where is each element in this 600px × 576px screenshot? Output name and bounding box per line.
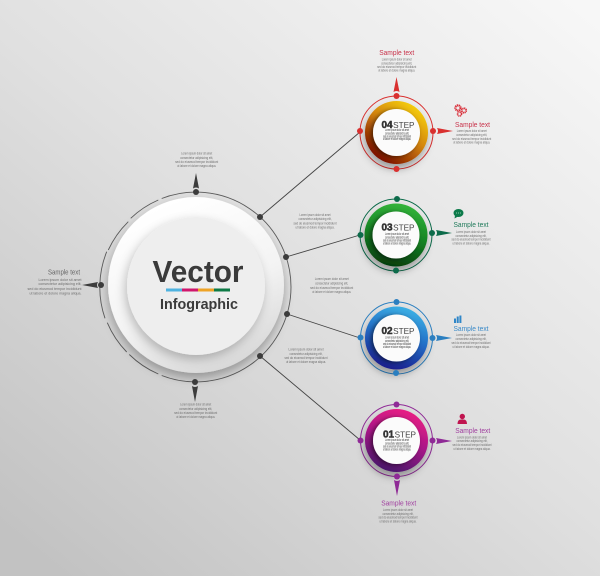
step 03 ring: [360, 199, 432, 271]
text block: between lines 3: ut labore et dolore magna aliqua.: [286, 360, 326, 364]
step 03: [358, 196, 435, 274]
arrow: step 04 top: [394, 77, 400, 92]
text block: between lines 2: consectetur adipisicing elit,: [315, 282, 348, 286]
step 03 copy: [383, 232, 411, 245]
text block: step 01 right: [452, 426, 492, 451]
icon: gears: [455, 105, 466, 116]
arrow: step 03 right: [436, 230, 452, 236]
step 01 dots: [358, 402, 436, 480]
hub white disc: [108, 197, 284, 373]
text block: step 03 right: consectetur adipisicing elit,: [456, 234, 486, 238]
text block: step 04 top: sed do eiusmod tempor incididunt: [377, 65, 416, 69]
text block: between lines 2: Lorem ipsum dolor sit amet: [315, 277, 349, 281]
text block: step 04 right: Sample text: [455, 120, 490, 129]
text block: step 02 right: ut labore et dolore magna aliqua.: [452, 345, 490, 349]
step 02: [358, 299, 436, 376]
icon: bar chart: [454, 316, 461, 323]
text block: step 04 top: Lorem ipsum dolor sit amet: [382, 58, 412, 62]
text block: between lines 1: ut labore et dolore magna aliqua.: [296, 226, 334, 230]
text block: step 01 bottom: Lorem ipsum dolor sit amet: [383, 508, 413, 512]
step 02 ring: [360, 302, 432, 374]
step 01 copy: ut labore et dolore magna aliqua.: [383, 448, 411, 452]
text block: between lines 1: [294, 213, 336, 230]
arrow: hub top: [193, 173, 199, 195]
step 02 copy: Lorem ipsum dolor sit amet: [385, 335, 409, 339]
central hub: [100, 192, 291, 382]
step 01 copy: consectetur adipisicing elit,: [385, 442, 409, 446]
step 04 copy: ut labore et dolore magna aliqua.: [383, 137, 411, 141]
step 03 colour disc: [364, 204, 428, 266]
text block: step 03 right: ut labore et dolore magna aliqua.: [452, 242, 490, 246]
step 01: [358, 402, 436, 480]
text block: step 01 bottom: [378, 498, 418, 524]
text block: between lines 3: sed do eiusmod tempor incididunt: [284, 356, 328, 360]
step 01 colour disc: [365, 409, 428, 472]
icon: speech bubble: [454, 209, 464, 218]
step 03 dots: [358, 196, 435, 274]
text block: step 02 right: Lorem ipsum dolor sit amet: [456, 333, 486, 337]
step 01 copy: Lorem ipsum dolor sit amet: [385, 438, 409, 442]
step 04 white disc: [373, 109, 420, 156]
text block: hub top: Lorem ipsum dolor sit amet: [181, 152, 212, 156]
text block: between lines 1: Lorem ipsum dolor sit amet: [300, 213, 330, 217]
text block: step 02 right: [452, 324, 490, 349]
step 02 copy: [383, 335, 411, 349]
text block: hub left: sed do eiusmod tempor incididunt: [28, 287, 82, 291]
step 04 copy: sed do eiusmod tempor incididunt: [383, 135, 411, 139]
connector lines: [260, 132, 360, 440]
subtitle: Infographic: Infographic: [160, 296, 238, 313]
step 04 dots: [357, 93, 436, 172]
step 02 colour disc: [365, 306, 428, 370]
step 03 copy: consectetur adipisicing elit,: [385, 236, 409, 240]
step 03 copy: Lorem ipsum dolor sit amet: [385, 232, 409, 236]
text block: hub bottom: ut labore et dolore magna aliqua.: [176, 415, 215, 419]
text block: step 03 right: sed do eiusmod tempor incididunt: [452, 238, 490, 242]
step 01 copy: sed do eiusmod tempor incididunt: [383, 445, 411, 449]
icon: person: [458, 414, 467, 424]
step 02 dots: [358, 299, 436, 376]
title: Vector: Vector: [152, 254, 244, 289]
text block: step 01 right: consectetur adipisicing elit,: [456, 439, 488, 443]
step 01 ring: [360, 404, 432, 476]
step 04 ring: [360, 96, 433, 169]
text block: step 04 right: Lorem ipsum dolor sit amet: [457, 129, 487, 133]
text block: between lines 2: [310, 277, 353, 294]
colour bar: [166, 288, 230, 292]
text block: step 04 top: ut labore et dolore magna aliqua.: [378, 69, 415, 73]
text block: hub bottom: consectetur adipisicing elit,: [179, 407, 212, 411]
text block: hub top: sed do eiusmod tempor incididunt: [175, 160, 218, 164]
text block: hub bottom: sed do eiusmod tempor incididunt: [174, 411, 217, 415]
text block: step 03 right: Sample text: [454, 220, 488, 229]
text block: between lines 2: sed do eiusmod tempor incididunt: [310, 286, 353, 290]
arrow: hub bottom: [192, 379, 198, 402]
text block: hub top: [175, 152, 218, 168]
text block: hub left: Sample text: [48, 268, 80, 276]
text block: hub top: consectetur adipisicing elit,: [180, 156, 213, 160]
arrow: hub left: [82, 282, 104, 288]
step 03 white disc: [372, 212, 420, 258]
text block: step 01 bottom: Sample text: [381, 498, 416, 508]
step 02 white disc: [373, 314, 420, 362]
step 03 copy: sed do eiusmod tempor incididunt: [383, 239, 411, 243]
text block: step 02 right: sed do eiusmod tempor incididunt: [452, 341, 490, 345]
text block: hub left: [28, 268, 82, 296]
text block: step 01 right: Sample text: [455, 426, 490, 435]
text block: step 01 right: Lorem ipsum dolor sit amet: [457, 436, 487, 440]
text block: hub bottom: Lorem ipsum dolor sit amet: [180, 402, 211, 406]
text block: step 04 right: consectetur adipisicing elit,: [456, 133, 487, 137]
step 04 copy: Lorem ipsum dolor sit amet: [385, 128, 409, 132]
hub inner disc: [127, 217, 265, 355]
step 04: [357, 77, 436, 172]
step 02 copy: sed do eiusmod tempor incididunt: [383, 342, 411, 346]
text block: hub left: Lorem ipsum dolor sit amet: [38, 278, 82, 282]
text block: step 01 bottom: ut labore et dolore magna aliqua.: [380, 520, 416, 524]
text block: hub left: consectetur adipisicing elit,: [38, 282, 82, 286]
step 04 copy: consectetur adipisicing elit,: [385, 132, 409, 136]
text block: step 04 top: Sample text: [379, 48, 414, 57]
step 02 copy: consectetur adipisicing elit,: [385, 339, 409, 343]
step 02 copy: ut labore et dolore magna aliqua.: [383, 345, 411, 349]
hub outer segmented ring: [100, 192, 291, 382]
step 04 label: 04STEP: [382, 120, 415, 131]
step 04 copy: [383, 128, 411, 141]
text block: step 04 top: consectetur adipisicing elit,: [381, 62, 412, 66]
arrow: step 01 right: [436, 438, 452, 444]
text block: hub top: ut labore et dolore magna aliqua.: [177, 164, 216, 168]
text block: step 03 right: [452, 220, 490, 246]
text block: step 03 right: Lorem ipsum dolor sit amet: [456, 230, 486, 234]
text block: step 04 right: sed do eiusmod tempor incididunt: [452, 137, 491, 141]
step 03 copy: ut labore et dolore magna aliqua.: [383, 241, 411, 245]
text block: step 01 right: ut labore et dolore magna aliqua.: [454, 447, 490, 451]
text block: step 04 right: [452, 120, 491, 144]
step 03 label: 03STEP: [382, 223, 415, 234]
text block: step 01 bottom: consectetur adipisicing elit,: [382, 512, 414, 516]
text block: between lines 1: consectetur adipisicing elit,: [298, 217, 332, 221]
arrow: step 02 right: [436, 335, 452, 341]
step 02 label: 02STEP: [382, 326, 415, 337]
text block: step 02 right: Sample text: [454, 324, 488, 333]
text block: hub bottom: [174, 402, 217, 419]
step 01 white disc: [373, 417, 420, 464]
text block: step 01 bottom: sed do eiusmod tempor incididunt: [378, 516, 418, 520]
hub connector dots: [257, 214, 290, 359]
text block: step 04 right: ut labore et dolore magna aliqua.: [453, 140, 490, 144]
text block: hub left: ut labore et dolore magna aliqua.: [30, 292, 82, 296]
text block: between lines 3: Lorem ipsum dolor sit amet: [288, 348, 324, 352]
text block: step 04 top: [377, 48, 416, 73]
arrow: step 01 bottom: [394, 480, 400, 496]
arrow: step 04 right: [437, 128, 453, 134]
step 01 label: 01STEP: [383, 429, 417, 440]
text block: between lines 3: [284, 348, 328, 364]
text block: between lines 2: ut labore et dolore magna aliqua.: [312, 290, 351, 294]
text block: step 01 right: sed do eiusmod tempor incididunt: [452, 443, 492, 447]
step 01 copy: [383, 438, 411, 452]
step 04 colour disc: [365, 101, 428, 164]
text block: step 02 right: consectetur adipisicing elit,: [456, 337, 486, 341]
text block: between lines 1: sed do eiusmod tempor incididunt: [294, 222, 336, 226]
text block: between lines 3: consectetur adipisicing elit,: [290, 352, 322, 356]
